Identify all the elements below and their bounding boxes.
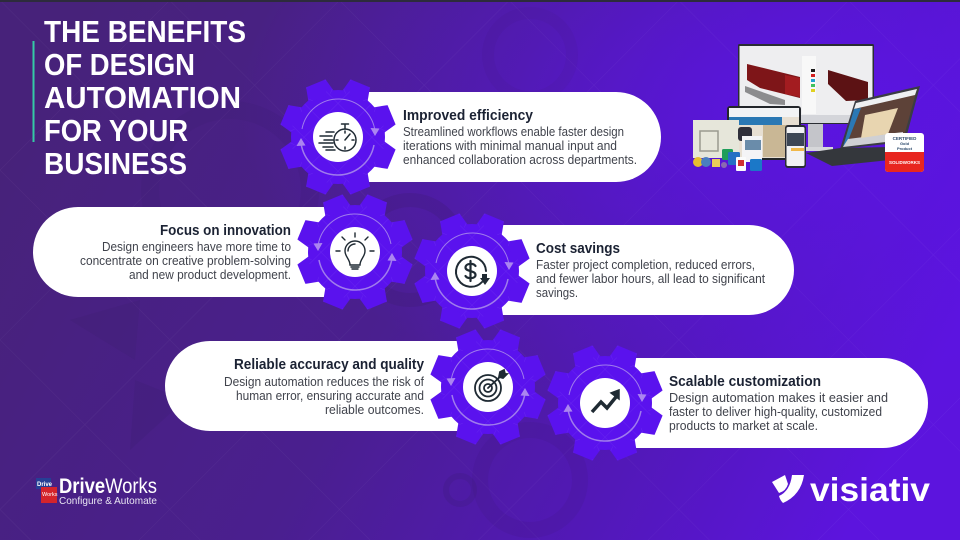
badge: certified gold product: [885, 133, 924, 172]
panel: cost savings: Cost savings: [536, 241, 620, 257]
logo: DriveWorks: [36, 475, 157, 507]
panel: cost savings: [500, 225, 794, 315]
title accent line: [32, 41, 34, 142]
logo: DriveWorks: Works: [42, 492, 58, 498]
panel: scalable customization: [633, 358, 928, 448]
tablet: [727, 106, 801, 160]
panel: improved efficiency: iterations with minimal manual input and: [403, 139, 617, 153]
logo: DriveWorks: Configure & Automate: [59, 495, 157, 507]
badge: certified gold product: Gold: [900, 141, 910, 146]
panel: scalable customization: Design automation makes it easier and: [669, 391, 888, 405]
panel: reliable accuracy and quality: reliable outcomes.: [325, 403, 424, 417]
logo: visiativ: visiativ: [810, 471, 931, 508]
gear: scalable customization: [546, 344, 664, 462]
office app icons: [693, 149, 762, 171]
icon: dollar with down arrow: [456, 257, 490, 287]
laptop: [806, 86, 920, 166]
panel: focus on innovation: Design engineers have more time to: [102, 240, 291, 254]
gear: improved efficiency: [279, 78, 397, 196]
phone: [785, 125, 806, 168]
gear: cost savings: [413, 212, 531, 330]
panel: cost savings: and fewer labor hours, all lead to significant: [536, 272, 765, 286]
product devices collage: [693, 44, 924, 172]
CAD drawing sheet: [693, 120, 762, 162]
panel: scalable customization: Scalable customization: [669, 374, 821, 390]
panel: scalable customization: faster to deliver high-quality, customized: [669, 405, 882, 419]
badge: certified gold product: CERTIFIED: [893, 136, 917, 141]
panel: cost savings: Faster project completion, reduced errors,: [536, 258, 755, 272]
panel: reliable accuracy and quality: Design automation reduces the risk of: [224, 375, 424, 389]
badge: certified gold product: Product: [897, 146, 913, 151]
panel: focus on innovation: and new product development.: [129, 268, 291, 282]
title: BUSINESS: [44, 146, 187, 181]
title: AUTOMATION: [44, 80, 241, 115]
panel: reliable accuracy and quality: human error, ensuring accurate and: [236, 389, 424, 403]
panel: focus on innovation: concentrate on creative problem-solving: [80, 254, 291, 268]
icon: stopwatch: [319, 124, 356, 151]
gear: reliable accuracy: [429, 328, 547, 446]
panel: focus on innovation: Focus on innovation: [160, 223, 291, 239]
icon: rising chart arrow: [592, 390, 619, 412]
badge: certified gold product: SOLIDWORKS: [889, 160, 920, 165]
panel: improved efficiency: Improved efficiency: [403, 108, 533, 124]
panel: focus on innovation: [33, 207, 327, 297]
panel: cost savings: savings.: [536, 286, 578, 300]
title: FOR YOUR: [44, 113, 188, 148]
panel: reliable accuracy and quality: Reliable accuracy and quality: [234, 357, 424, 373]
panel: improved efficiency: Streamlined workflows enable faster design: [403, 125, 624, 139]
panel: improved efficiency: enhanced collaboration across departments.: [403, 153, 637, 167]
monitor: [738, 44, 874, 151]
logo: DriveWorks: DriveWorks: [59, 475, 157, 498]
title: [44, 14, 246, 181]
icon: light bulb: [336, 233, 374, 269]
logo: DriveWorks: Drive: [37, 482, 53, 488]
icon: target: [475, 370, 507, 401]
gear: focus on innovation: [296, 193, 414, 311]
title: OF DESIGN: [44, 47, 195, 82]
title: THE BENEFITS: [44, 14, 246, 49]
panel: reliable accuracy and quality: [165, 341, 460, 431]
panel: scalable customization: products to market at scale.: [669, 419, 818, 433]
panel: improved efficiency: [367, 92, 661, 182]
